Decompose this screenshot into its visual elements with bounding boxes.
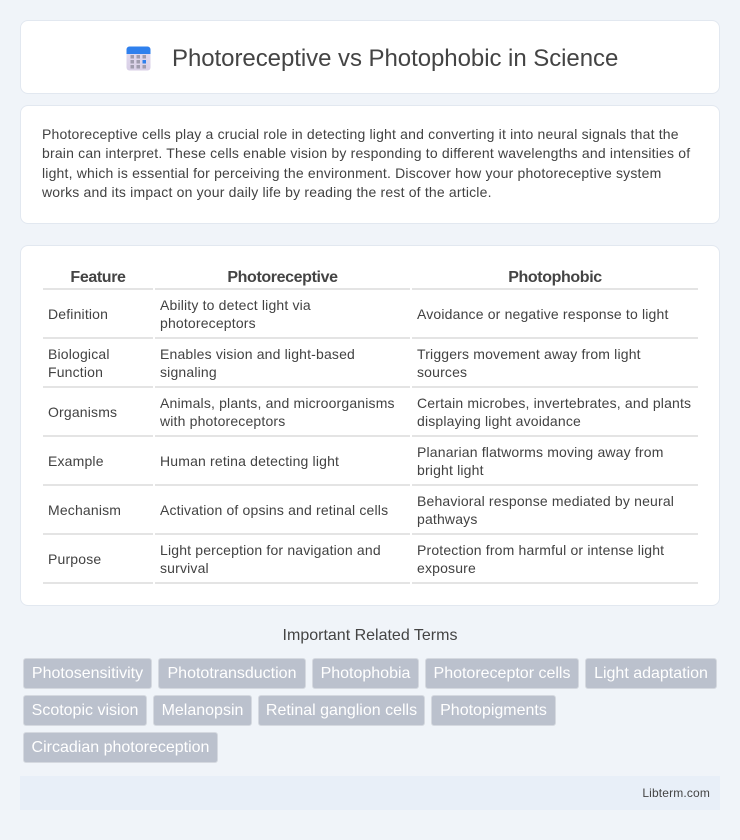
comparison table	[43, 269, 698, 584]
row: example	[48, 444, 664, 478]
row: biological function: Triggers movement away from light	[417, 346, 641, 362]
row: definition: Definition	[48, 306, 108, 322]
tag: Melanopsin	[162, 702, 243, 719]
row: example: Human retina detecting light	[160, 453, 339, 469]
footer source: Libterm.com	[642, 786, 710, 800]
row: purpose: Purpose	[48, 551, 101, 567]
row: example: bright light	[417, 462, 484, 478]
table header row	[70, 269, 602, 286]
row: definition: Ability to detect light via	[160, 297, 311, 313]
row: definition	[48, 297, 669, 331]
row: purpose: Protection from harmful or intense light	[417, 542, 664, 558]
row: purpose: survival	[160, 560, 209, 576]
row: definition: photoreceptors	[160, 315, 256, 331]
row: biological function	[48, 346, 641, 380]
comparison table panel	[20, 245, 720, 606]
tag	[431, 695, 556, 726]
table header row: Photophobic	[508, 269, 602, 286]
header panel	[20, 20, 720, 94]
tag	[153, 695, 252, 726]
row: purpose: exposure	[417, 560, 476, 576]
tag: Photoreceptor cells	[434, 665, 570, 682]
tag	[158, 658, 306, 689]
row: definition: Avoidance or negative response to light	[417, 306, 669, 322]
row: biological function: sources	[417, 364, 467, 380]
intro text: Photoreceptive cells play a crucial role in detecting light and converting it into neural signals that the	[42, 126, 679, 142]
tag: Retinal ganglion cells	[266, 702, 417, 719]
table header row: Feature	[70, 269, 126, 286]
tag: Photosensitivity	[32, 665, 143, 682]
intro text	[42, 126, 690, 200]
row: example: Example	[48, 453, 104, 469]
tag: Circadian photoreception	[32, 739, 209, 756]
row: organisms: with photoreceptors	[160, 413, 285, 429]
footer bar	[20, 776, 720, 810]
tag	[23, 658, 152, 689]
tag: Photopigments	[440, 702, 547, 719]
intro text: works and its impact on your daily life by reading the rest of the article.	[42, 184, 492, 200]
row: mechanism: Activation of opsins and retinal cells	[160, 502, 388, 518]
intro text: light, which is essential for perceiving the environment. Discover how your photoreceptive system	[42, 165, 661, 181]
row: mechanism: Behavioral response mediated by neural	[417, 493, 674, 509]
row: purpose	[48, 542, 664, 576]
icon: calendar grid	[126, 46, 150, 70]
row: biological function: Biological	[48, 346, 110, 362]
row: organisms	[48, 395, 691, 429]
intro panel	[20, 105, 720, 224]
tag	[312, 658, 419, 689]
row: mechanism: pathways	[417, 511, 478, 527]
row: example: Planarian flatworms moving away from	[417, 444, 664, 460]
tag: Scotopic vision	[32, 702, 138, 719]
related terms tags	[23, 658, 717, 763]
row: biological function: Enables vision and light-based	[160, 346, 355, 362]
related terms heading: Important Related Terms	[283, 627, 457, 644]
row: mechanism	[48, 493, 674, 527]
tag	[425, 658, 579, 689]
row: purpose: Light perception for navigation and	[160, 542, 381, 558]
tag: Phototransduction	[168, 665, 296, 682]
row: biological function: signaling	[160, 364, 217, 380]
row: organisms: Organisms	[48, 404, 117, 420]
tag	[258, 695, 425, 726]
table header row: Photoreceptive	[227, 269, 338, 286]
title: Photoreceptive vs Photophobic in Science	[172, 45, 618, 72]
row: organisms: Animals, plants, and microorganisms	[160, 395, 395, 411]
intro text: brain can interpret. These cells enable vision by responding to different wavelengths and intensities of	[42, 145, 690, 161]
tag: Photophobia	[321, 665, 410, 682]
row: biological function: Function	[48, 364, 103, 380]
tag	[23, 695, 147, 726]
tag	[585, 658, 717, 689]
row: organisms: Certain microbes, invertebrates, and plants	[417, 395, 691, 411]
tag	[23, 732, 218, 763]
row: organisms: displaying light avoidance	[417, 413, 581, 429]
row: mechanism: Mechanism	[48, 502, 121, 518]
tag: Light adaptation	[594, 665, 708, 682]
